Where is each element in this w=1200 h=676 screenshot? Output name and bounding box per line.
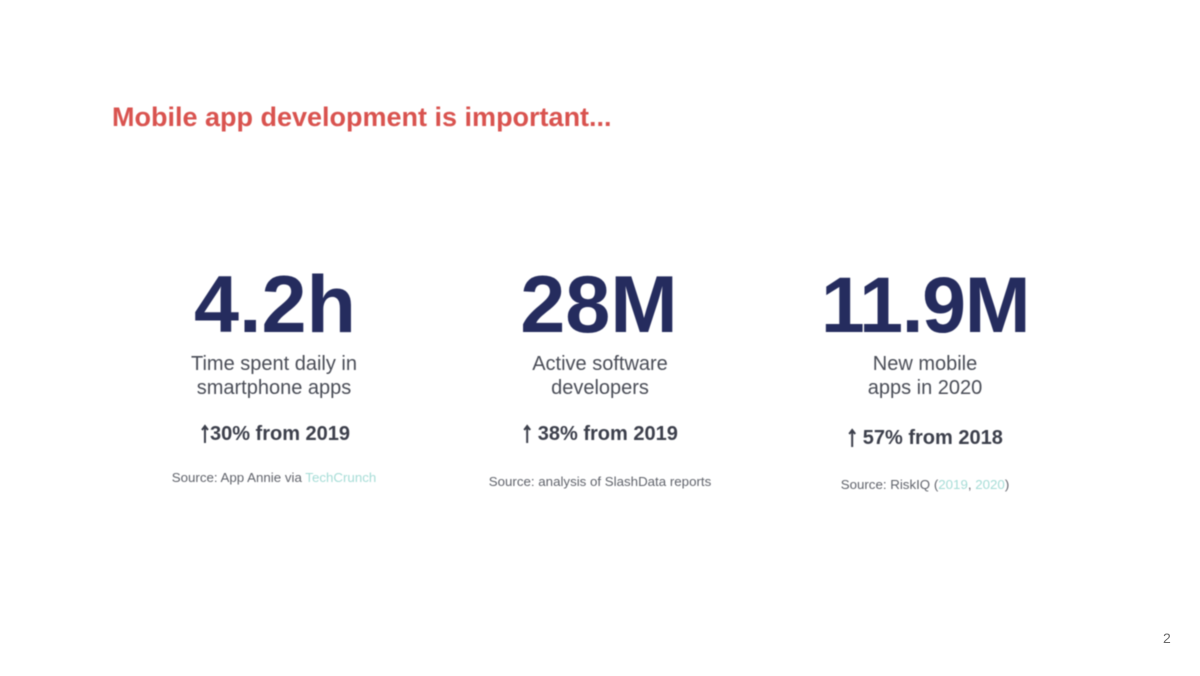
description: developers — [532, 353, 668, 399]
panel: new apps — [821, 260, 1029, 492]
growth: 38%: 38% from 2019 — [538, 423, 678, 445]
panel: time spent — [172, 260, 376, 486]
description: time spent: Time spent daily in — [191, 353, 357, 375]
description: new apps — [868, 353, 982, 399]
source: App Annie: Source: App Annie via TechCrunch — [172, 470, 376, 485]
growth: 30%: 30% from 2019 — [210, 423, 350, 445]
description: new apps: apps in 2020 — [868, 377, 982, 399]
source: RiskIQ: Source: RiskIQ (2019, 2020) — [841, 477, 1009, 492]
panel: developers — [489, 260, 712, 490]
description: developers: Active software — [532, 353, 668, 375]
stat: 28M: 28M — [520, 260, 678, 350]
description: time spent: smartphone apps — [197, 377, 351, 399]
stat: 4.2h: 4.2h — [194, 260, 356, 350]
source: SlashData: Source: analysis of SlashData reports — [489, 474, 711, 489]
description: time spent — [190, 353, 357, 399]
title: Mobile app development is important... — [112, 102, 612, 132]
stat: 11.9M: 11.9M — [821, 260, 1029, 349]
description: developers: developers — [551, 377, 649, 399]
growth: 57%: 57% from 2018 — [863, 427, 1003, 449]
description: new apps: New mobile — [873, 353, 977, 375]
page number: 2 — [1163, 630, 1171, 646]
